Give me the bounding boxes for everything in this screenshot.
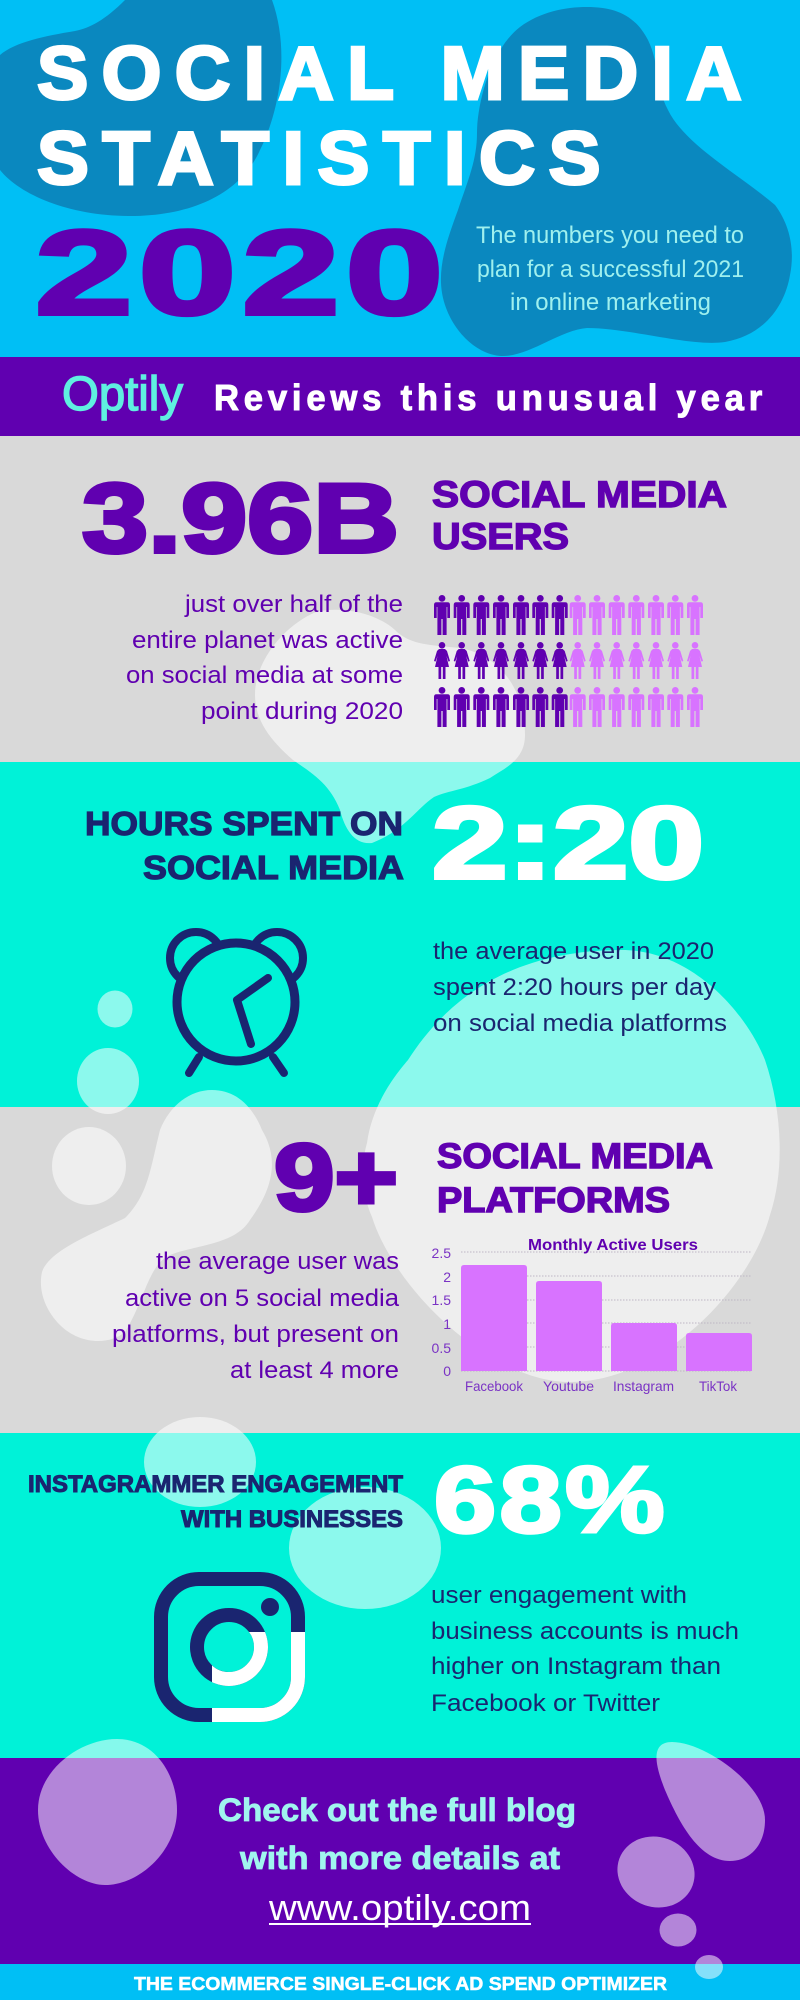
footer text: THE ECOMMERCE SINGLE-CLICK AD SPEND OPTIMIZER [134, 1974, 667, 1994]
description: user engagement with [431, 1582, 687, 1609]
y axis labels: 1.5 [432, 1292, 451, 1308]
icon: alarm clock [170, 932, 303, 1073]
description: the average user in 2020 [433, 938, 714, 965]
subtitle [476, 222, 744, 316]
heading [28, 1471, 403, 1533]
band: optily reviews [0, 357, 800, 436]
call to action: with more details at [239, 1840, 560, 1876]
y axis labels: 0.5 [432, 1340, 451, 1356]
band heading: Reviews this unusual year [214, 377, 767, 418]
description [112, 1248, 400, 1384]
pictogram: people [434, 595, 703, 727]
description: on social media at some [126, 662, 403, 689]
logo: optily: Optily [62, 368, 183, 421]
description: Facebook or Twitter [431, 1690, 660, 1717]
heading: HOURS SPENT ON [85, 805, 403, 842]
description: the average user was [156, 1248, 399, 1275]
panel: instagram engagement [0, 1433, 800, 1758]
title: STATISTICS [37, 116, 614, 200]
x axis labels: TikTok [699, 1378, 738, 1394]
chart title: Monthly Active Users [528, 1237, 698, 1254]
y axis labels: 2 [443, 1269, 451, 1285]
big number: 2:20 [432, 786, 704, 900]
y axis labels: 2.5 [432, 1245, 451, 1261]
description [126, 591, 403, 725]
heading: SOCIAL MEDIA [432, 474, 727, 515]
stat: hours spent [85, 786, 727, 1073]
description: active on 5 social media [125, 1285, 400, 1312]
x axis labels [465, 1378, 738, 1394]
description [431, 1582, 739, 1717]
title: SOCIAL MEDIA [37, 31, 755, 115]
header background blobs [0, 0, 792, 356]
description: entire planet was active [132, 627, 403, 654]
heading [85, 805, 404, 886]
description: on social media platforms [433, 1010, 727, 1037]
footer band [0, 1964, 800, 2000]
big number: 68% [434, 1447, 668, 1552]
panel: call to action [0, 1758, 800, 1964]
y axis labels: 0 [443, 1363, 451, 1379]
heading [437, 1137, 713, 1220]
panel: hours spent [0, 762, 800, 1107]
call to action: Check out the full blog [218, 1792, 576, 1828]
description: point during 2020 [201, 698, 403, 725]
heading [432, 474, 727, 557]
heading: USERS [432, 516, 569, 557]
y axis labels: 1 [443, 1316, 451, 1332]
big number: 3.96B [82, 463, 399, 573]
description: spent 2:20 hours per day [433, 974, 716, 1001]
description: at least 4 more [230, 1357, 399, 1384]
subtitle: in online marketing [510, 289, 711, 316]
panel: header [0, 0, 800, 357]
panel: social media platforms [0, 1107, 800, 1433]
stat: social media users [82, 463, 727, 727]
heading: INSTAGRAMMER ENGAGEMENT [28, 1471, 403, 1498]
subtitle: The numbers you need to [476, 222, 744, 249]
stat: platforms [112, 1125, 752, 1394]
description: higher on Instagram than [431, 1653, 721, 1680]
icon: instagram [161, 1579, 298, 1715]
title year: 2020 [35, 206, 449, 340]
x axis labels: Youtube [543, 1378, 594, 1394]
x axis labels: Instagram [613, 1378, 674, 1394]
heading: SOCIAL MEDIA [437, 1137, 713, 1176]
panel: social media users [0, 436, 800, 762]
heading: SOCIAL MEDIA [143, 849, 404, 886]
heading: WITH BUSINESSES [181, 1506, 403, 1533]
x axis labels: Facebook [465, 1378, 524, 1394]
description: business accounts is much [431, 1618, 739, 1645]
description: platforms, but present on [112, 1321, 399, 1348]
description: just over half of the [184, 591, 403, 618]
stat: instagram engagement [28, 1447, 739, 1717]
big number: 9+ [274, 1125, 398, 1231]
y axis labels [432, 1245, 451, 1379]
bars [461, 1265, 752, 1371]
subtitle: plan for a successful 2021 [477, 256, 744, 283]
link: www.optily.com [268, 1887, 531, 1928]
description [433, 938, 727, 1037]
light blobs overlay [38, 610, 780, 1979]
title [37, 31, 755, 200]
heading: PLATFORMS [437, 1181, 670, 1220]
bar chart: monthly active users [432, 1237, 752, 1394]
call to action [218, 1792, 576, 1928]
